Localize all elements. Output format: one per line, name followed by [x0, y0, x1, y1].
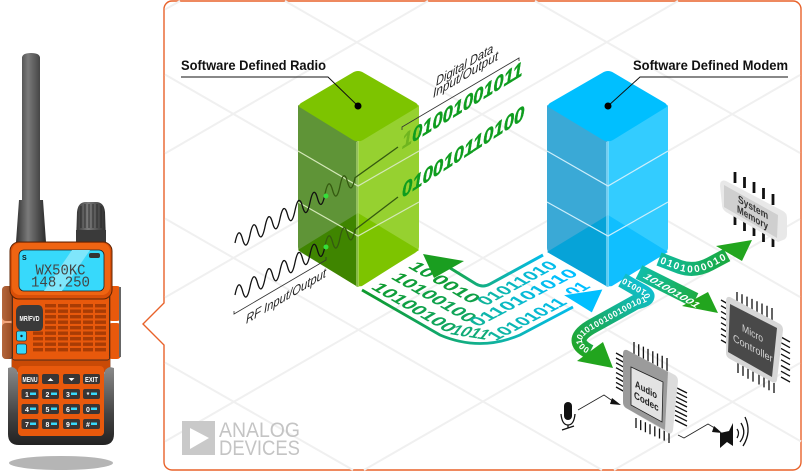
block: software defined radio — [298, 71, 419, 287]
display: WX50KC — [36, 264, 86, 280]
icon: handheld radio — [2, 53, 121, 470]
signal dots — [324, 194, 328, 250]
flow digits: 0110101010 — [464, 266, 583, 329]
display bezel — [10, 242, 112, 299]
logo: Analog Devices: ANALOG — [219, 419, 300, 442]
keypad — [22, 374, 100, 429]
central data flow — [362, 254, 603, 344]
flow digits: 01 — [560, 279, 595, 299]
keypad: # — [86, 422, 90, 429]
keypad: MENU — [22, 377, 38, 384]
flow digits: 10100100 — [367, 280, 462, 335]
wave two — [235, 244, 325, 297]
keypad: 9 — [66, 422, 70, 429]
arrow: to radio — [423, 254, 464, 278]
keypad: * — [87, 392, 90, 399]
arrow: modem to audio codec: 001010100100100101010010010 — [576, 278, 650, 353]
memory pins — [735, 172, 773, 247]
chart: RF waves — [235, 147, 398, 297]
radio shadow — [9, 456, 113, 470]
wave one through block — [325, 147, 398, 196]
title: software defined modem — [604, 57, 788, 110]
keypad: 7 — [25, 422, 29, 429]
logo: Analog Devices — [182, 419, 300, 460]
flow digits — [367, 258, 595, 343]
keypad: 3 — [66, 392, 70, 399]
side buttons — [2, 286, 121, 359]
title: software defined modem: Software Defined Modem — [633, 57, 788, 73]
chip: micro controller: Controller — [733, 332, 773, 366]
radio right face — [358, 105, 419, 287]
chip: system memory: Memory — [737, 204, 768, 233]
modem left face — [547, 105, 608, 287]
arrow: modem to micro controller — [639, 272, 718, 313]
keypad: 8 — [46, 422, 50, 429]
MR/FVD button — [16, 305, 43, 331]
chip: audio codec: Audio — [635, 379, 657, 402]
keypad: 0 — [86, 407, 90, 414]
digital data digits: 101001001011 — [402, 58, 523, 154]
display: S — [22, 255, 27, 262]
MR/FVD button: MR/FVD — [20, 316, 40, 323]
codec pins — [616, 342, 687, 443]
title: software defined radio: Software Defined Radio — [181, 57, 326, 73]
modem right face — [608, 105, 668, 287]
keypad: 4 — [25, 407, 29, 414]
flow digits: 0010 — [427, 272, 485, 306]
arrow: modem to system memory — [656, 240, 752, 276]
wave one — [235, 192, 325, 245]
display — [19, 250, 104, 292]
keypad base — [8, 367, 114, 445]
flow lines — [362, 290, 573, 344]
display: 148.250 — [31, 276, 90, 292]
antenna — [16, 53, 46, 242]
chip: system memory — [720, 172, 787, 247]
arrow: modem to system memory: 0101000010 — [660, 254, 726, 272]
arrow: to modem — [563, 289, 603, 313]
label: digital data input output: Digital Data — [436, 40, 493, 89]
digital data digits: 010010110100 — [402, 101, 525, 203]
radio body — [12, 290, 110, 372]
arrow: modem to audio codec — [572, 274, 655, 368]
arrow: codec to speaker — [678, 424, 722, 438]
icon: speaker — [720, 417, 748, 448]
flow digits: 10101011 — [482, 295, 572, 343]
chip: micro controller — [721, 292, 790, 393]
keypad: 5 — [46, 407, 50, 414]
chip: audio codec — [616, 342, 687, 443]
block: software defined modem — [547, 71, 668, 287]
chip: system memory: System — [738, 194, 768, 223]
chip: micro controller: Micro — [742, 322, 763, 346]
grille — [12, 295, 110, 360]
label: RF input output: RF Input/Output — [246, 264, 327, 327]
icon: microphone — [561, 402, 575, 430]
flow digits: 01011010 — [472, 258, 562, 308]
keypad: 6 — [66, 407, 70, 414]
flow digits: 1011 — [447, 322, 495, 343]
radio top face — [299, 71, 418, 142]
title: software defined radio — [181, 57, 362, 110]
flow digits: 10100100 — [387, 270, 482, 325]
controller pins — [721, 292, 790, 393]
wave two through block — [325, 197, 398, 248]
digital data digits — [402, 58, 525, 203]
keypad: 2 — [46, 392, 50, 399]
keypad: 1 — [25, 392, 29, 399]
blue buttons — [16, 331, 26, 354]
modem top face — [548, 71, 667, 142]
radio back shadow — [298, 213, 419, 287]
arrow: modem to micro controller: 101001001 — [639, 273, 703, 310]
chip: audio codec: Codec — [634, 390, 659, 415]
label: digital data input output: Input/Output — [433, 47, 499, 101]
keypad: EXIT — [85, 377, 99, 384]
logo: Analog Devices: DEVICES — [219, 437, 300, 460]
flow digits: 10 — [404, 259, 441, 281]
arrow: microphone to codec — [578, 395, 621, 410]
volume knob — [76, 202, 106, 242]
radio left face — [298, 105, 358, 287]
